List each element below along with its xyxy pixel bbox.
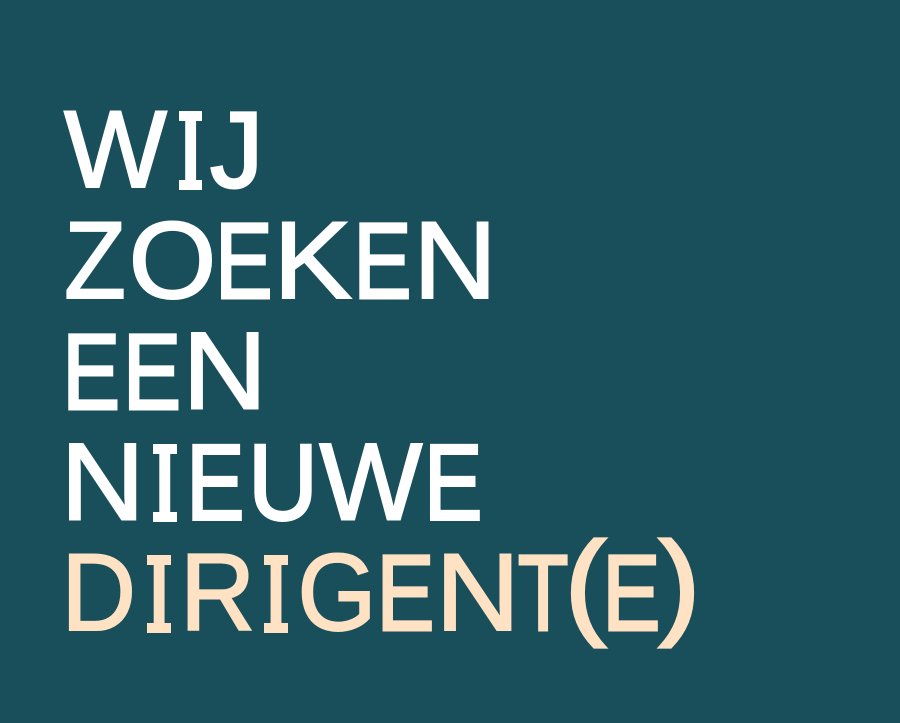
heading line: EEN (62, 311, 267, 432)
heading line: ZOEKEN: Z (64, 200, 126, 322)
heading line: NIEUWE: I (152, 424, 177, 542)
heading line: ZOEKEN: E (353, 201, 411, 321)
heading line: WIJ: J (210, 91, 263, 210)
heading line: DIRIGENT(E) highlighted: D (61, 532, 136, 654)
heading line: WIJ (63, 89, 263, 211)
heading line: DIRIGENT(E) highlighted (61, 519, 700, 654)
heading line: ZOEKEN: E (215, 201, 273, 321)
heading line: WIJ: W (64, 89, 167, 211)
heading line: EEN: E (123, 312, 181, 432)
heading line: DIRIGENT(E) highlighted: I (147, 535, 172, 653)
heading line: ZOEKEN: K (273, 200, 352, 322)
heading line: NIEUWE: W (319, 422, 422, 543)
heading line: DIRIGENT(E) highlighted: I (264, 535, 289, 653)
heading line: NIEUWE (60, 422, 482, 543)
heading line: ZOEKEN (64, 200, 497, 322)
heading line: DIRIGENT(E) highlighted: R (180, 532, 255, 654)
heading line: DIRIGENT(E) highlighted: E (602, 534, 660, 653)
heading line: ZOEKEN: N (413, 200, 497, 322)
heading line: EEN: N (182, 311, 267, 432)
heading line: WIJ: I (178, 92, 203, 210)
heading line: DIRIGENT(E) highlighted: E (377, 534, 434, 653)
heading line: DIRIGENT(E) highlighted: T (518, 534, 568, 653)
heading line: DIRIGENT(E) highlighted: G (298, 532, 377, 654)
heading line: DIRIGENT(E) highlighted: ( (565, 519, 605, 648)
heading line: DIRIGENT(E) highlighted: N (436, 532, 520, 654)
heading line: NIEUWE: E (186, 423, 244, 543)
heading line: EEN: E (62, 312, 120, 432)
heading line: DIRIGENT(E) highlighted: ) (660, 519, 700, 648)
heading line: NIEUWE: U (248, 423, 318, 543)
heading line: NIEUWE: E (424, 423, 482, 543)
heading line: ZOEKEN: O (129, 200, 216, 322)
heading line: NIEUWE: N (60, 422, 145, 543)
